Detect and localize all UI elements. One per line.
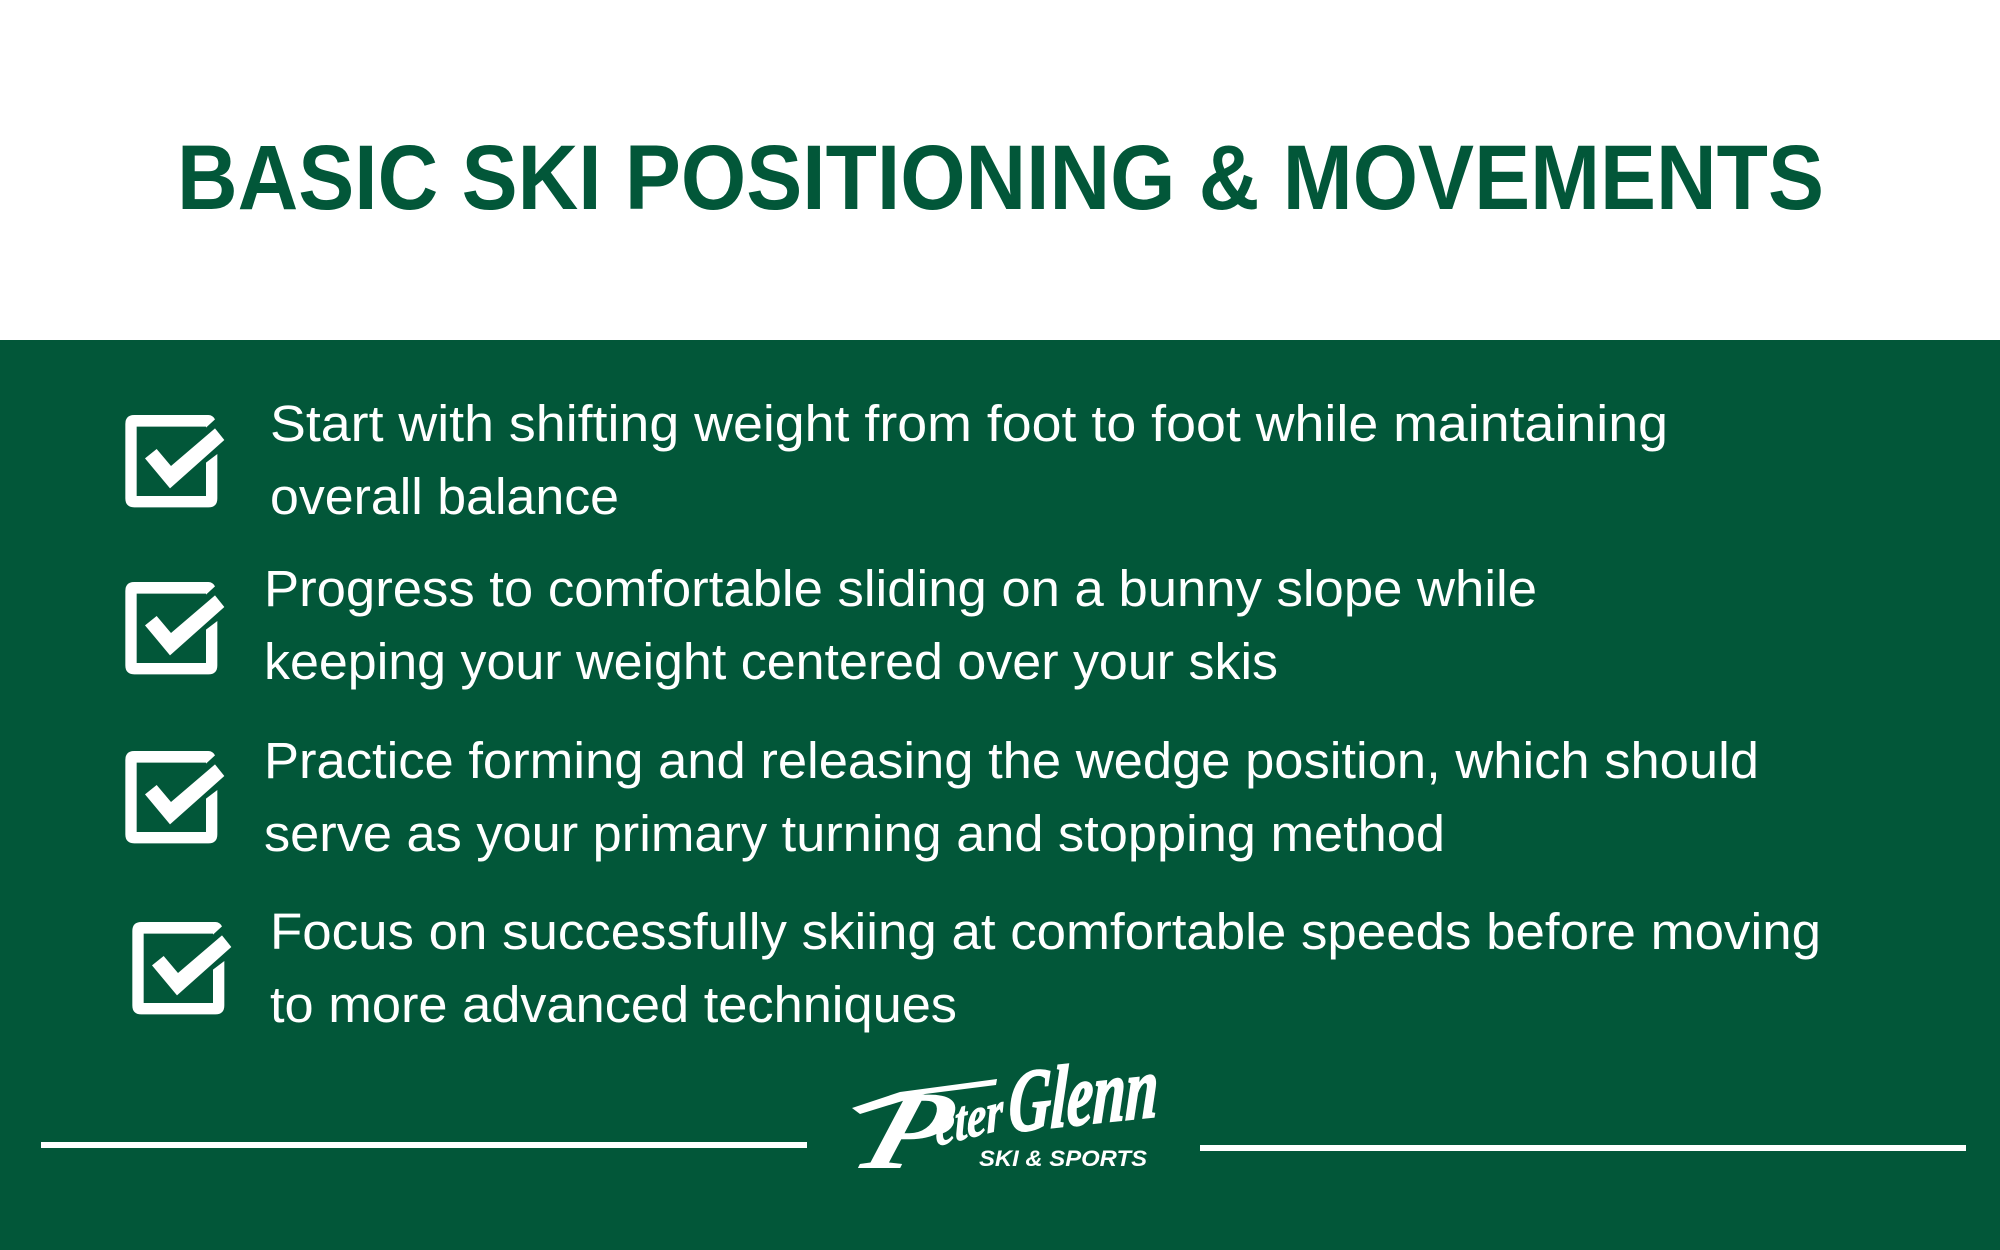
- text: item 3: serve as your primary turning and stopping method: [264, 805, 1445, 862]
- icon: checkbox 1: [125, 415, 224, 507]
- text: item 4: to more advanced techniques: [270, 976, 957, 1033]
- text: item 1: overall balance: [270, 468, 619, 525]
- text: item 3: Practice forming and releasing the wedge position, which should: [264, 732, 1759, 789]
- logo: Peter Glenn Ski & Sports: SKI & SPORTS: [979, 1146, 1147, 1171]
- text: item 1: Start with shifting weight from foot to foot while maintaining: [270, 395, 1668, 452]
- header panel: [0, 0, 2000, 340]
- green panel: [0, 340, 2000, 1250]
- icon: checkbox 4: [132, 922, 231, 1014]
- text: item 2: Progress to comfortable sliding on a bunny slope while: [264, 560, 1537, 617]
- text: item 3: [264, 732, 1759, 862]
- right footer line: [1200, 1145, 1966, 1151]
- title: BASIC SKI POSITIONING & MOVEMENTS: [177, 127, 1824, 229]
- text: item 1: [270, 395, 1668, 525]
- text: item 4: Focus on successfully skiing at comfortable speeds before moving: [270, 903, 1821, 960]
- logo: Peter Glenn Ski & Sports: [849, 1038, 1160, 1192]
- icon: checkbox 3: [125, 751, 224, 843]
- text: item 4: [270, 903, 1821, 1033]
- logo: Peter Glenn Ski & Sports: eter: [934, 1079, 1005, 1159]
- text: item 2: [264, 560, 1537, 690]
- left footer line: [41, 1142, 807, 1148]
- icon: checkbox 2: [125, 582, 224, 674]
- logo: Peter Glenn Ski & Sports: P: [849, 1069, 969, 1192]
- logo: Peter Glenn Ski & Sports: Glenn: [1007, 1038, 1160, 1152]
- text: item 2: keeping your weight centered over your skis: [264, 633, 1278, 690]
